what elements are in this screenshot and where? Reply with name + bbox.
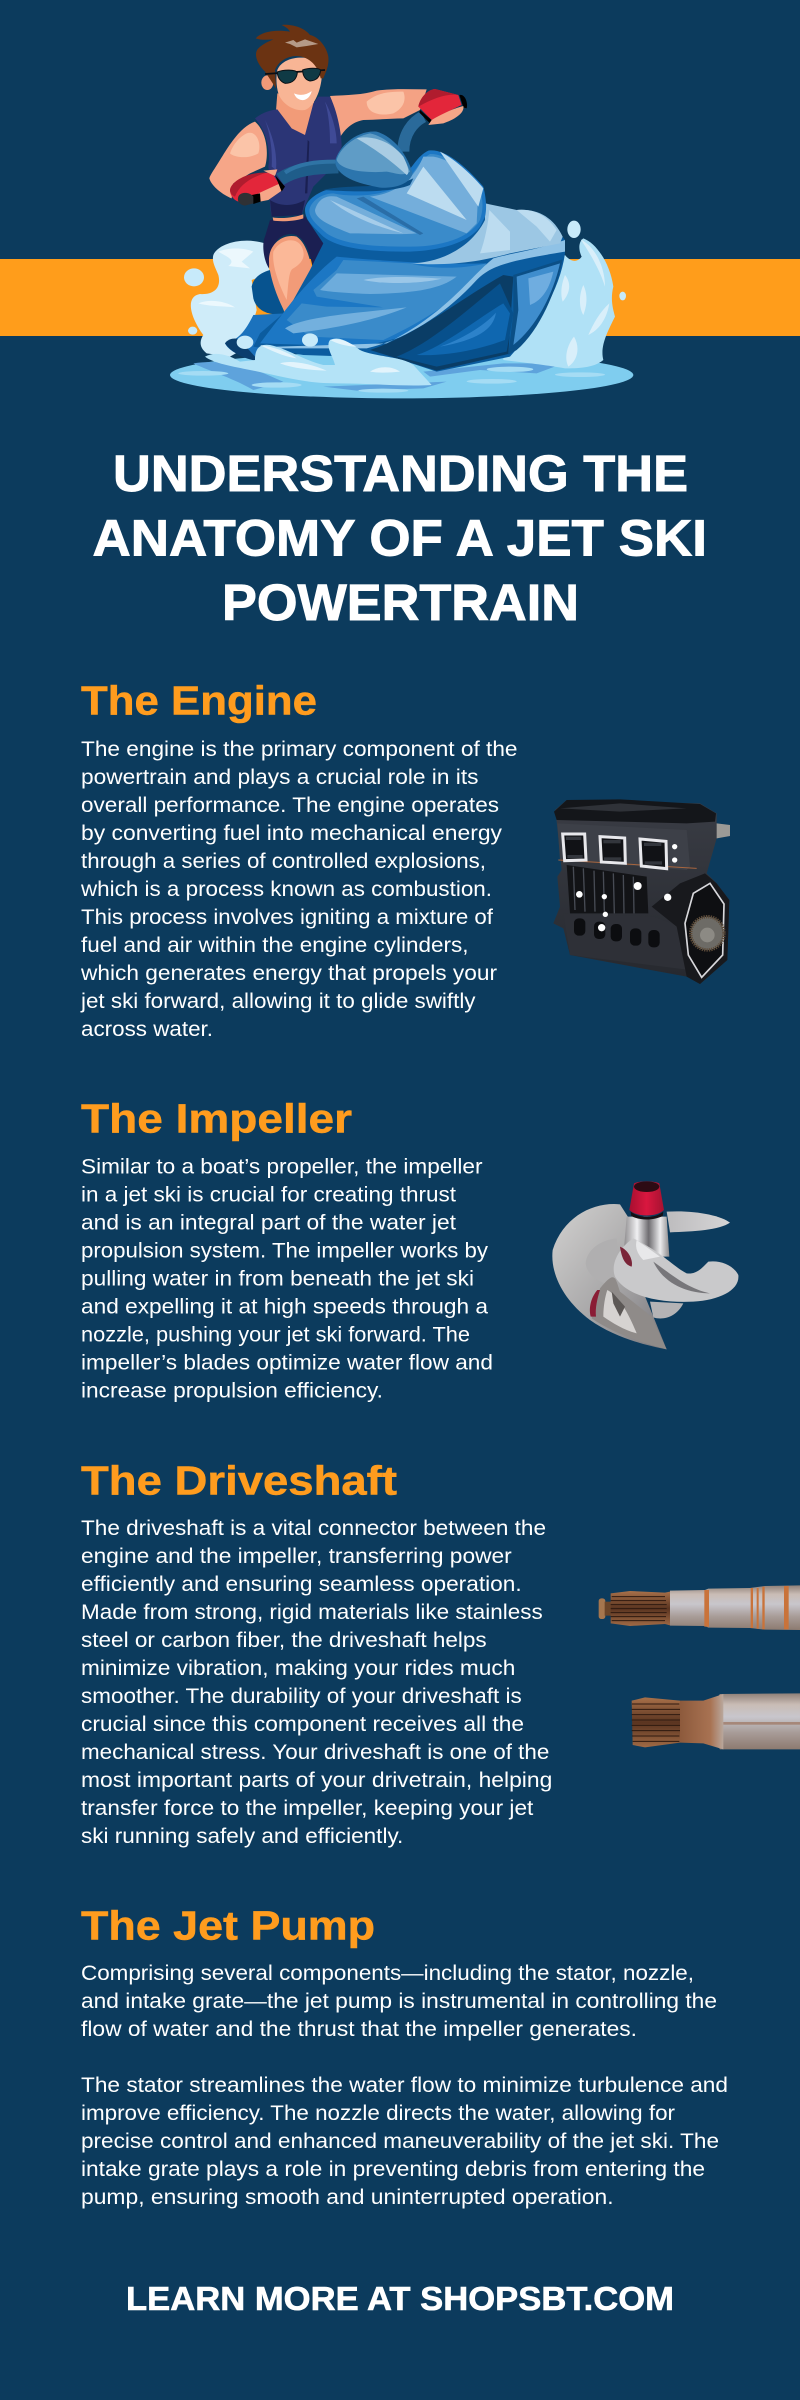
text block: driveshaft: efficiently and ensuring seamless operation.	[81, 1573, 522, 1596]
text block: impeller: impeller’s blades optimize water flow and	[81, 1351, 493, 1374]
upper shaft	[599, 1585, 800, 1630]
text block: engine: by converting fuel into mechanical energy	[81, 822, 503, 845]
image: engine block	[553, 799, 730, 984]
text block: driveshaft: Made from strong, rigid materials like stainless	[81, 1601, 543, 1624]
text block: impeller: and expelling it at high speeds through a	[81, 1295, 488, 1318]
text block: driveshaft: transfer force to the impeller, keeping your jet	[81, 1797, 533, 1820]
text block: jet pump intro: flow of water and the thrust that the impeller generates.	[81, 2018, 637, 2041]
title: POWERTRAIN	[222, 574, 579, 631]
console dome	[323, 178, 413, 191]
text block: engine: overall performance. The engine operates	[81, 794, 499, 817]
text block: driveshaft: minimize vibration, making your rides much	[81, 1657, 515, 1680]
text block: jet pump details: precise control and enhanced maneuverability of the jet ski. The	[81, 2130, 719, 2153]
text block: driveshaft: engine and the impeller, transferring power	[81, 1545, 512, 1568]
rider upper body	[209, 25, 427, 221]
right splash	[503, 238, 615, 368]
text block: driveshaft: steel or carbon fiber, the driveshaft helps	[81, 1629, 487, 1652]
illustration: jet ski rider	[170, 25, 633, 398]
text block: impeller: Similar to a boat’s propeller, the impeller	[81, 1155, 482, 1178]
left handlebar	[280, 167, 338, 179]
title: UNDERSTANDING THE	[113, 445, 688, 502]
text block: engine: through a series of controlled explosions,	[81, 850, 486, 873]
right glove	[419, 95, 467, 123]
text block: impeller	[81, 1155, 493, 1402]
text block: driveshaft: ski running safely and efficiently.	[81, 1825, 403, 1848]
title: ANATOMY OF A JET SKI	[92, 510, 707, 566]
life vest	[255, 97, 342, 217]
hull	[253, 203, 565, 372]
heading: The Driveshaft: The Driveshaft	[81, 1457, 397, 1503]
text block: driveshaft: crucial since this component receives all the	[81, 1713, 524, 1736]
rear deck	[252, 270, 285, 314]
left glove	[230, 173, 280, 202]
text block: engine: fuel and air within the engine cylinders,	[81, 934, 468, 957]
text block: impeller: increase propulsion efficiency.	[81, 1379, 383, 1402]
handlebars, gloves, seat and console	[230, 89, 486, 252]
text block: jet pump intro: Comprising several components—including the stator, nozzle,	[81, 1962, 694, 1985]
shorts and leg	[263, 217, 323, 272]
title	[92, 445, 707, 631]
text block: driveshaft: smoother. The durability of your driveshaft is	[81, 1685, 522, 1708]
text block: jet pump details: intake grate plays a role in preventing debris from entering the	[81, 2158, 705, 2181]
left arm	[209, 122, 267, 198]
text block: jet pump details: pump, ensuring smooth and uninterrupted operation.	[81, 2186, 614, 2209]
text block: driveshaft: most important parts of your drivetrain, helping	[81, 1769, 552, 1792]
text block: engine: This process involves igniting a mixture of	[81, 906, 493, 929]
right arm	[330, 89, 427, 138]
text block: impeller: nozzle, pushing your jet ski forward. The	[81, 1323, 470, 1346]
text block: engine: which is a process known as combustion.	[80, 878, 492, 901]
text block: impeller: pulling water in from beneath the jet ski	[81, 1267, 474, 1290]
text block: engine	[80, 738, 518, 1041]
text block: engine: powertrain and plays a crucial role in its	[81, 766, 478, 789]
orange banner stripe	[0, 259, 800, 336]
lower shaft	[632, 1693, 800, 1749]
front splash	[205, 333, 432, 385]
footer call to action: LEARN MORE AT SHOPSBT.COM	[126, 2280, 674, 2317]
text block: jet pump details	[81, 2074, 728, 2209]
waist skin	[273, 214, 303, 221]
sunglasses	[265, 70, 325, 74]
image: two driveshafts	[599, 1585, 800, 1749]
heading: The Impeller: The Impeller	[81, 1096, 352, 1142]
text block: jet pump details: The stator streamlines the water flow to minimize turbulence and	[81, 2074, 728, 2097]
right handlebar	[403, 117, 423, 152]
smile	[294, 91, 312, 100]
text block: engine: The engine is the primary component of the	[81, 738, 518, 761]
hair	[256, 25, 328, 88]
face	[276, 58, 322, 110]
text block: jet pump details: improve efficiency. The nozzle directs the water, allowing for	[81, 2102, 675, 2125]
text block: engine: jet ski forward, allowing it to glide swiftly	[80, 990, 476, 1013]
text block: driveshaft	[81, 1517, 552, 1848]
text block: jet pump intro: and intake grate—the jet pump is instrumental in controlling the	[81, 1990, 717, 2013]
text block: driveshaft: mechanical stress. Your driveshaft is one of the	[81, 1741, 549, 1764]
seat	[305, 150, 486, 252]
neck and chest	[276, 93, 314, 136]
heading: The Engine: The Engine	[81, 678, 317, 724]
water and splashes behind the hull	[170, 217, 633, 398]
text block: engine: across water.	[81, 1018, 213, 1041]
heading: The Jet Pump: The Jet Pump	[81, 1902, 375, 1948]
text block: jet pump intro	[81, 1962, 717, 2041]
text block: driveshaft: The driveshaft is a vital connector between the	[81, 1517, 546, 1540]
image: impeller	[552, 1181, 738, 1349]
text block: engine: which generates energy that propels your	[80, 962, 497, 985]
text block: impeller: in a jet ski is crucial for creating thrust	[81, 1183, 456, 1206]
left splash	[191, 241, 270, 357]
text block: impeller: propulsion system. The impeller works by	[81, 1239, 489, 1262]
text block: impeller: and is an integral part of the water jet	[81, 1211, 456, 1234]
